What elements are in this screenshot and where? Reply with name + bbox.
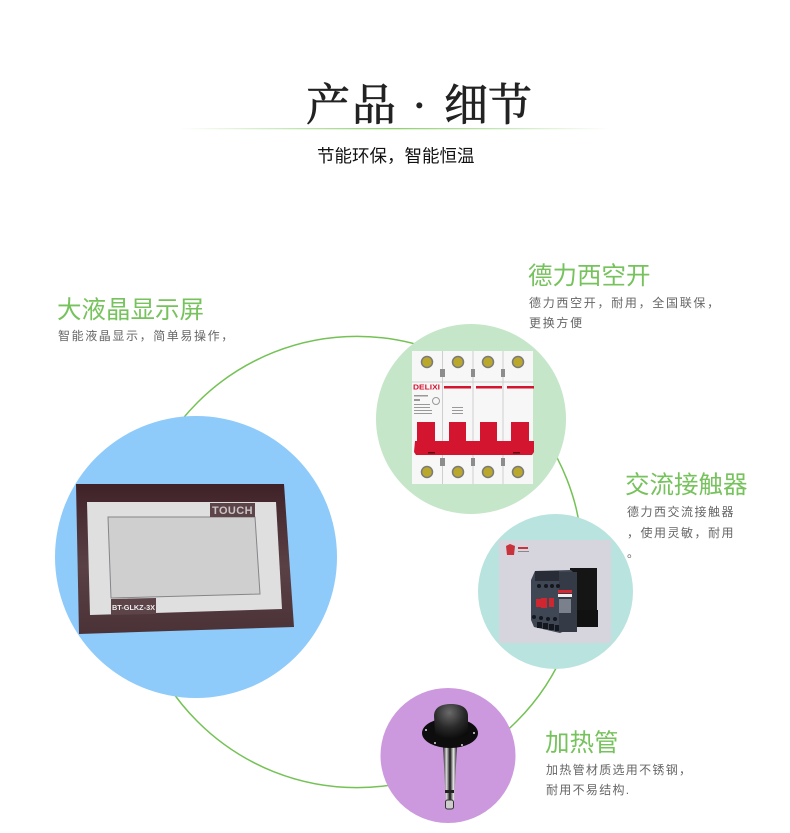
heading: breaker: 德力西空开: [528, 263, 650, 290]
circle: circuit breaker: [376, 324, 566, 514]
caption: heating tube: 加热管材质选用不锈钢，: [546, 763, 692, 777]
heating tube flange: [422, 718, 478, 748]
title: 品: [352, 81, 396, 130]
touch label: TOUCH: [212, 505, 253, 517]
title: 节: [488, 81, 532, 130]
breaker body: [412, 351, 533, 484]
title underline: [180, 128, 610, 129]
heating tube shaft: [443, 745, 457, 806]
caption: contactor: 。: [627, 546, 641, 560]
caption: heating tube: [546, 763, 692, 796]
touch screen display: [108, 517, 260, 598]
connecting ring: [131, 336, 583, 788]
title: [306, 81, 532, 130]
caption: display: 智能液晶显示，简单易操作，: [58, 329, 235, 343]
caption: breaker: 更换方便: [529, 316, 584, 330]
breaker brand: DELIXI: [413, 384, 440, 392]
touch screen bezel panel: [87, 502, 282, 615]
model label: BT-GLKZ-3X: [112, 603, 155, 612]
heading: display: 大液晶显示屏: [57, 297, 204, 324]
breaker red switches: [414, 422, 534, 455]
circle: contactor: [478, 514, 633, 669]
contactor photo background: [499, 540, 611, 643]
title: ·: [412, 81, 427, 130]
model label: [111, 598, 156, 615]
title: 产: [306, 81, 350, 130]
title: 细: [444, 81, 488, 130]
subtitle: 节能环保，智能恒温: [317, 146, 474, 166]
circle: heating tube: [380, 688, 516, 823]
breaker terminals: [422, 356, 524, 478]
caption: breaker: 德力西空开，耐用，全国联保，: [529, 296, 721, 310]
circle: touch screen: [55, 416, 337, 698]
heating tube tip: [446, 800, 454, 809]
contactor logo: [506, 544, 529, 555]
caption: breaker: [529, 296, 721, 330]
caption: contactor: 德力西交流接触器: [627, 505, 735, 519]
heating tube cap: [434, 704, 468, 738]
caption: heating tube: 耐用不易结构.: [546, 782, 630, 796]
caption: contactor: ，使用灵敏，耐用: [627, 526, 735, 540]
contactor device: [531, 568, 598, 633]
heading: heating tube: 加热管: [545, 730, 618, 757]
caption: contactor: [627, 505, 735, 560]
heading: contactor: 交流接触器: [625, 472, 748, 499]
touch screen frame: [76, 484, 294, 634]
